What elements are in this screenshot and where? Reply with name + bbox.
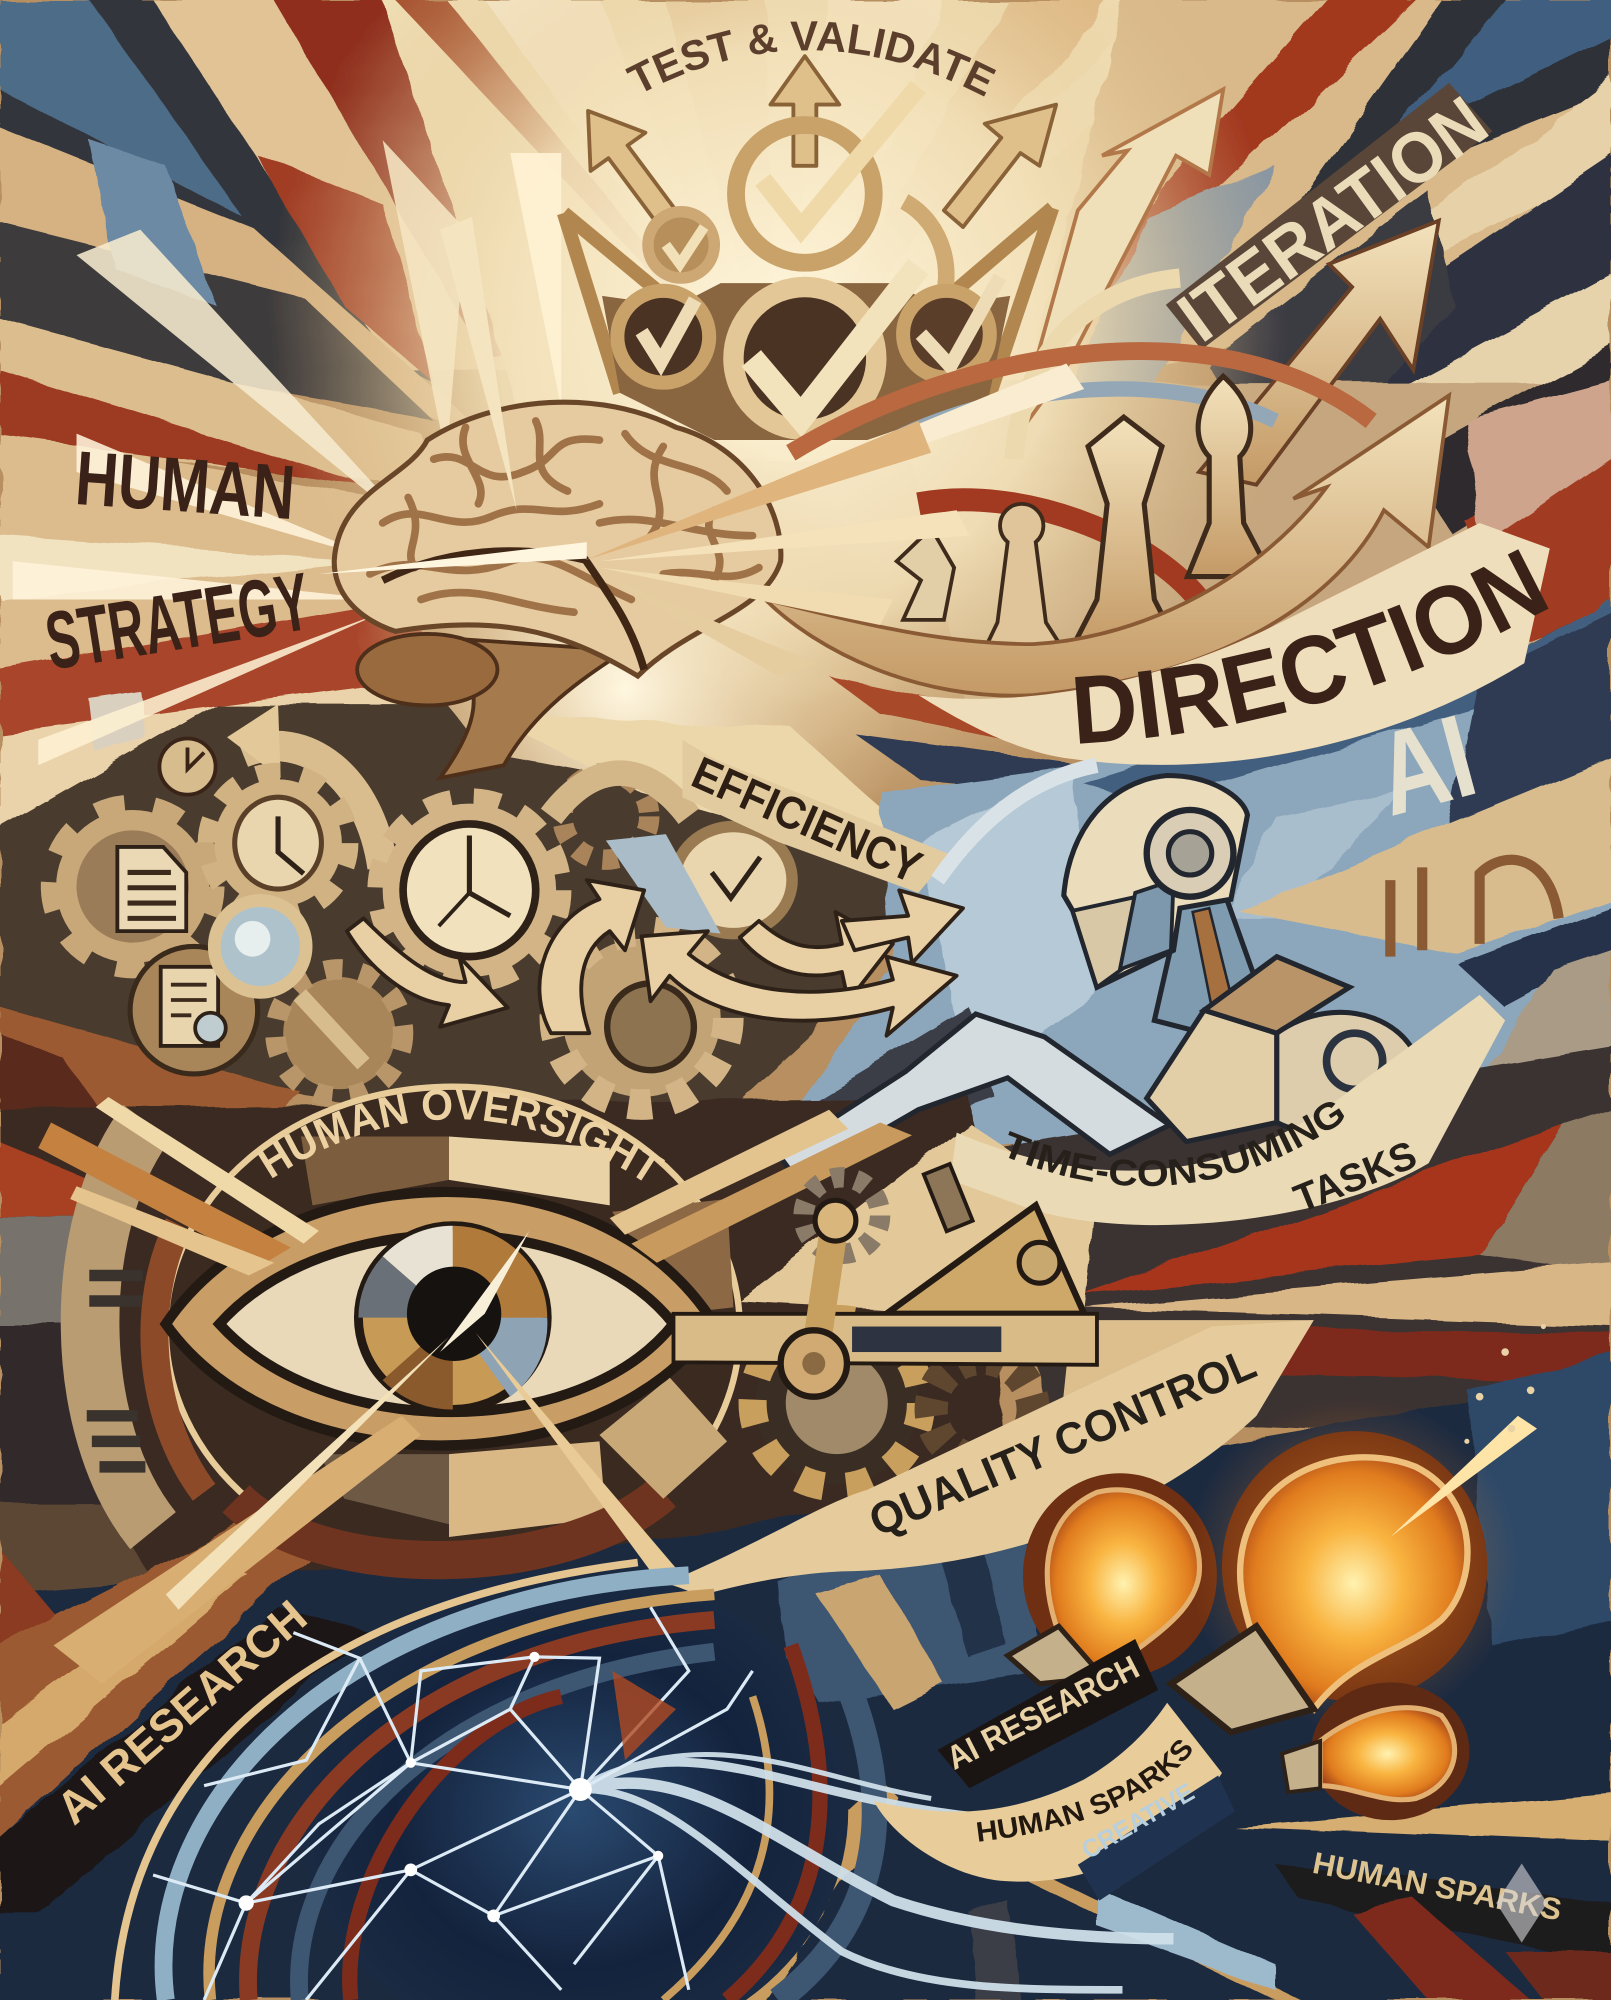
queen <box>1074 417 1180 649</box>
bulb: medium <box>1008 1473 1217 1684</box>
white filaments <box>153 1607 753 2000</box>
arrow: upper right <box>740 912 893 1001</box>
strategy: STRATEGY <box>40 556 316 687</box>
human sparks right: HUMAN SPARKS <box>1310 1846 1564 1928</box>
time-consuming: TIME-CONSUMING <box>1008 1102 1344 1186</box>
arrows upward <box>588 56 1056 227</box>
bottom labels <box>46 1590 1564 1942</box>
neural network swirl <box>115 1562 1173 2000</box>
arrow: large arc top <box>242 746 383 867</box>
robot eye panel <box>1120 880 1173 969</box>
gear inner <box>786 1352 888 1454</box>
arrows: curved trio <box>347 880 963 1036</box>
steel bands <box>765 599 1611 1186</box>
icon: magnifier <box>214 901 364 1064</box>
label: test and validate: TEST & VALIDATE <box>625 21 996 96</box>
lower bands <box>0 1046 1611 1645</box>
brain stem <box>440 638 625 778</box>
robot arm <box>778 1014 1170 1180</box>
quality control banner <box>638 1320 1314 1614</box>
gear: right <box>555 931 728 1105</box>
efficiency word: EFFICIENCY <box>685 746 930 893</box>
top right streaks <box>1020 0 1611 434</box>
test and validate cluster <box>557 21 1059 440</box>
eye lid <box>166 1192 714 1445</box>
arc right <box>904 202 946 312</box>
bottom brown arc <box>236 1492 663 1560</box>
direction band <box>918 523 1550 765</box>
light bulbs <box>1008 1324 1546 1820</box>
robot ear <box>1147 810 1233 897</box>
cerebrum <box>334 402 781 676</box>
quality control word: QUALITY CONTROL <box>862 1339 1263 1546</box>
AI glyph fragments <box>1390 860 1559 957</box>
efficiency banner <box>682 740 950 893</box>
top block cream <box>449 1136 610 1205</box>
arrow head top <box>227 704 281 778</box>
arrow: left arc <box>539 880 644 1033</box>
top blocks <box>301 1136 449 1205</box>
AI word: AI <box>1363 690 1488 840</box>
upper right streaks <box>610 1110 848 1235</box>
human strategy label <box>40 436 316 687</box>
neck strut <box>1193 908 1231 1008</box>
arrow: arc top right <box>551 773 689 816</box>
sparkle mark <box>1496 1864 1547 1943</box>
cream band <box>874 1703 1222 1882</box>
time consuming banner <box>952 995 1505 1226</box>
bottom dark field <box>0 1352 1611 2000</box>
icon: document <box>117 847 186 931</box>
quadrant plate <box>886 1205 1084 1314</box>
small clock <box>159 739 216 795</box>
left dial ticks <box>87 1276 145 1467</box>
clock: efficiency <box>675 827 792 934</box>
spark streak <box>1390 1416 1537 1537</box>
AI research small: AI RESEARCH <box>941 1649 1145 1778</box>
centre sun glow <box>255 0 1327 893</box>
cerebellum <box>357 634 497 705</box>
robot and AI <box>778 690 1559 1180</box>
left dial band <box>90 1122 153 1531</box>
gear right <box>931 1358 1033 1460</box>
gear: upper right small <box>563 773 649 860</box>
red accents <box>612 1671 676 1760</box>
sparks <box>1464 1324 1546 1444</box>
node sparks <box>239 1652 663 1922</box>
iteration band <box>1166 83 1492 349</box>
upper left streaks <box>96 1097 319 1244</box>
gear: clock <box>209 774 347 912</box>
arrow: right upper <box>1199 221 1439 485</box>
crown outline <box>564 208 1052 398</box>
bar <box>673 1314 1097 1365</box>
eye white <box>219 1235 673 1412</box>
arrow: far right <box>842 890 963 963</box>
iteration word: ITERATION <box>1164 81 1502 357</box>
robot face plate <box>1073 893 1154 987</box>
bishop <box>1188 376 1272 577</box>
arc behind chess pieces <box>791 351 1371 599</box>
pawn <box>982 504 1066 654</box>
gear: large clock <box>380 801 559 980</box>
right top blocks <box>612 1199 733 1314</box>
red ring left <box>154 1224 204 1492</box>
gear: lower left <box>130 946 258 1074</box>
bottom blocks <box>449 1441 606 1537</box>
arrow: sweeping direction arrow <box>765 395 1449 696</box>
right blocks <box>600 1378 727 1499</box>
ring with tick <box>736 125 874 263</box>
dark central fissure <box>383 551 644 670</box>
gear large <box>755 1321 918 1485</box>
quality control machine <box>638 1164 1314 1614</box>
banner <box>950 995 1505 1225</box>
tan wedge <box>1059 1320 1314 1441</box>
knight <box>897 528 954 620</box>
top center light rays <box>383 0 1225 459</box>
sunburst rays over the top <box>13 140 561 765</box>
right dark middle <box>893 344 1611 791</box>
shoulder curl <box>1277 1012 1422 1135</box>
rising arrows and iteration <box>1014 81 1502 485</box>
bulb: large <box>1171 1397 1518 1732</box>
human oversight eye <box>38 1084 912 1666</box>
arrow: down right <box>347 918 508 1027</box>
brain <box>319 217 1084 778</box>
left streaks <box>0 370 459 829</box>
direction word: DIRECTION <box>1075 549 1548 744</box>
gear rear <box>804 1177 880 1254</box>
arrow: large top <box>1014 89 1223 440</box>
iris <box>358 1226 547 1409</box>
lever <box>781 1164 1060 1397</box>
gear: lower centre <box>276 969 403 1097</box>
flow lines <box>580 1754 1173 1990</box>
chess pieces <box>897 376 1272 654</box>
human sparks centre: HUMAN SPARKS <box>976 1740 1192 1842</box>
human oversight word: HUMAN OVERSIGHT <box>258 1090 665 1180</box>
streaks left of direction <box>829 676 1084 793</box>
eye rays <box>38 1097 912 1684</box>
arrow: main sweep <box>642 931 957 1036</box>
beams through the brain <box>319 217 1084 676</box>
arrow: curved <box>1014 278 1180 459</box>
bulb: small <box>1282 1682 1469 1820</box>
human: HUMAN <box>73 436 298 536</box>
steel shard <box>606 834 721 934</box>
blue arc around robot <box>938 765 1097 880</box>
dark core <box>300 1569 848 2000</box>
AI research large: AI RESEARCH <box>46 1590 316 1834</box>
bottom block dark <box>319 1454 449 1524</box>
top left streaks <box>0 0 548 485</box>
crown base <box>602 283 1010 440</box>
creative band <box>1078 1776 1235 1901</box>
tasks: TASKS <box>1288 1133 1423 1221</box>
concentric flows <box>115 1562 875 2000</box>
robot head <box>1064 776 1247 987</box>
robot torso <box>1147 957 1422 1142</box>
ai research band <box>938 1639 1158 1788</box>
checks <box>617 87 1000 430</box>
robot neck <box>1154 893 1256 1033</box>
gears and efficiency <box>54 704 963 1105</box>
label bands <box>874 1639 1235 1901</box>
creative: CREATIVE <box>1077 1778 1199 1865</box>
gear: document <box>54 807 212 966</box>
gear plate <box>0 704 931 1151</box>
brain folds <box>370 421 759 612</box>
dial body <box>166 1087 740 1571</box>
